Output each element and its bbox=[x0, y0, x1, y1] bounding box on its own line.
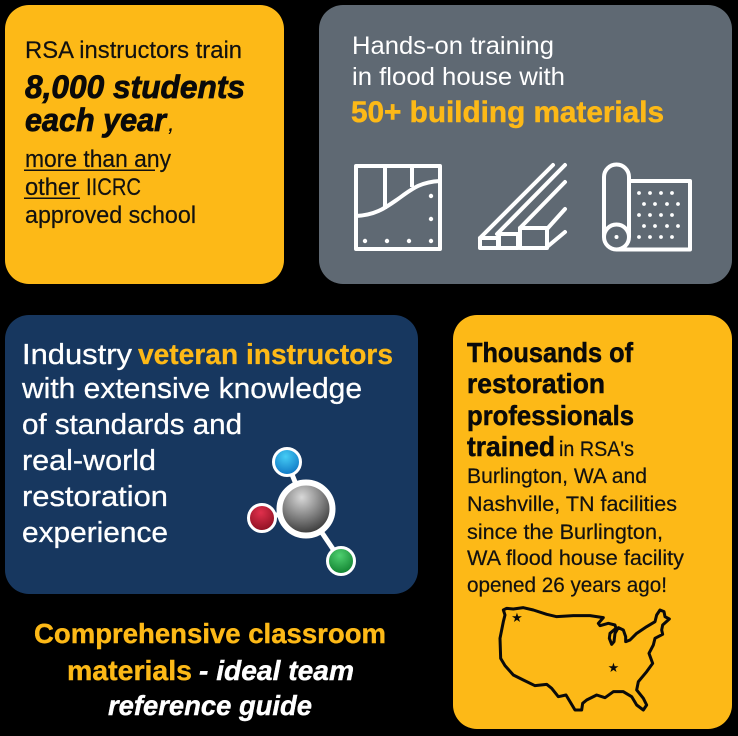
heading: thousands of restoration professionals trained: restoration bbox=[467, 368, 605, 399]
heading: thousands of restoration professionals trained: professionals bbox=[467, 400, 634, 431]
icon: molecule bbox=[248, 448, 354, 574]
text: industry veteran instructors: restoration bbox=[22, 481, 168, 513]
text: facilities description bbox=[467, 438, 685, 597]
icon: US map bbox=[500, 608, 669, 710]
text: industry veteran instructors: Industry bbox=[22, 339, 133, 371]
callout: classroom materials: materials bbox=[67, 655, 192, 686]
panel: 8,000 students bbox=[5, 5, 284, 284]
panel: veteran instructors bbox=[5, 315, 418, 594]
text: facilities description: Nashville, TN facilities bbox=[467, 493, 677, 516]
text: hands-on training: in flood house with bbox=[352, 63, 565, 91]
text: more than any other IICRC approved school: other bbox=[25, 174, 79, 201]
text: more than any other IICRC approved school bbox=[24, 146, 196, 229]
text: hands-on training bbox=[352, 32, 565, 91]
panel: flood house materials bbox=[319, 5, 732, 284]
callout: classroom materials: - ideal team bbox=[199, 655, 354, 686]
text: industry veteran instructors: with extensive knowledge bbox=[21, 373, 362, 405]
text: industry veteran instructors bbox=[21, 339, 393, 549]
text: facilities description: opened 26 years ago! bbox=[467, 574, 667, 597]
callout: classroom materials: Comprehensive classroom bbox=[34, 618, 386, 649]
icon: lumber bbox=[480, 165, 565, 248]
callout: classroom materials bbox=[34, 618, 386, 721]
text: industry veteran instructors: veteran instructors bbox=[138, 339, 393, 371]
text: facilities description: WA flood house facility bbox=[467, 547, 685, 570]
heading: 8,000 students each year bbox=[25, 69, 245, 138]
text: facilities description: in RSA's bbox=[559, 438, 634, 461]
icon: material roll bbox=[604, 164, 690, 250]
text: facilities description: Burlington, WA and bbox=[467, 465, 647, 488]
heading: thousands of restoration professionals trained: trained bbox=[467, 431, 555, 462]
icon: US map: ★ bbox=[608, 660, 619, 675]
heading: thousands of restoration professionals trained bbox=[467, 337, 634, 462]
heading: 8,000 students each year: each year bbox=[25, 102, 167, 138]
text: industry veteran instructors: of standards and bbox=[22, 409, 242, 441]
heading: thousands of restoration professionals trained: Thousands of bbox=[467, 337, 634, 368]
heading: 50+ building materials: 50+ building materials bbox=[351, 96, 664, 129]
heading: 8,000 students each year: , bbox=[168, 110, 175, 137]
panel: thousands of professionals bbox=[453, 315, 732, 729]
text: more than any other IICRC approved school: approved school bbox=[25, 202, 196, 229]
text: facilities description: since the Burlington, bbox=[467, 521, 663, 544]
text: more than any other IICRC approved school: more than any bbox=[25, 146, 171, 173]
text: industry veteran instructors: experience bbox=[22, 517, 168, 549]
text: hands-on training: Hands-on training bbox=[352, 32, 554, 60]
text: RSA instructors train: RSA instructors train bbox=[25, 37, 242, 64]
icon: US map: ★ bbox=[511, 610, 523, 625]
text: industry veteran instructors: real-world bbox=[22, 445, 156, 477]
heading: 8,000 students each year: 8,000 students bbox=[25, 69, 245, 105]
icon: wall section bbox=[356, 166, 440, 249]
text: more than any other IICRC approved school: IICRC bbox=[86, 174, 141, 201]
callout: classroom materials: reference guide bbox=[108, 690, 312, 721]
